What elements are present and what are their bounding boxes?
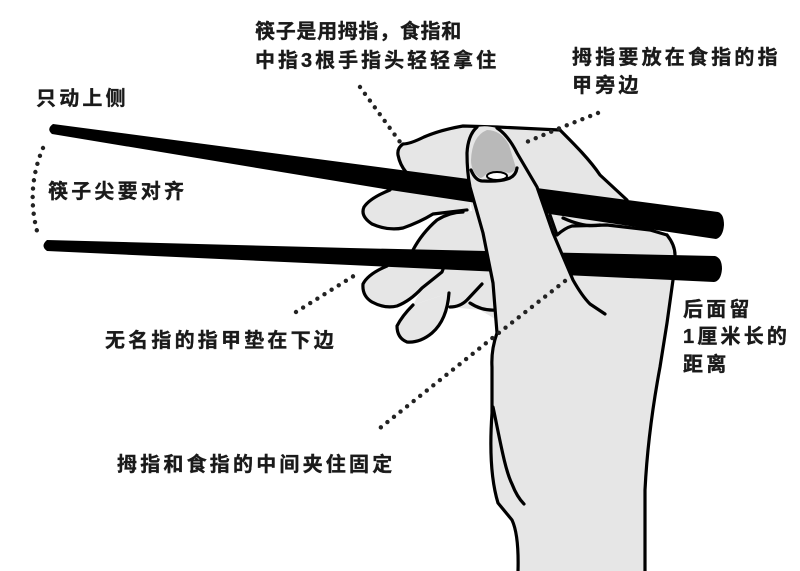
- dotted leader: ring finger: [296, 272, 360, 312]
- label: hold with three fingers: [255, 19, 499, 72]
- ring finger: [363, 264, 445, 307]
- dotted leader: top finger note: [360, 87, 400, 142]
- dotted arc: tips aligned: [33, 148, 43, 231]
- chopstick: upper: [49, 124, 724, 239]
- label: leave one centimeter behind: 后面留: [683, 297, 753, 321]
- middle finger: [363, 190, 467, 229]
- ring finger upper: [413, 212, 463, 250]
- label: leave one centimeter behind: 1厘米长的: [683, 325, 790, 348]
- label: thumb beside index nail: 甲旁边: [572, 73, 642, 97]
- label: thumb beside index nail: 拇指要放在食指的指: [572, 45, 781, 69]
- label: ring finger nail below: 无名指的指甲垫在下边: [105, 329, 337, 352]
- hand and wrist: [463, 126, 675, 571]
- thumbnail: [471, 130, 516, 178]
- label: tips aligned: 筷子尖要对齐: [48, 179, 187, 203]
- label: hold with three fingers: 筷子是用拇指，食指和: [255, 19, 462, 43]
- fill between the lower fingers: [400, 210, 497, 320]
- thumb outline: [467, 127, 605, 333]
- thumbnail tip: [471, 168, 517, 181]
- thumb: [467, 126, 605, 333]
- label: clamp between thumb and index: 拇指和食指的中间夹住固定: [117, 452, 395, 476]
- dotted leader: thumb and index: [375, 281, 565, 432]
- label: hold with three fingers: 中指3根手指头轻轻拿住: [255, 48, 499, 72]
- label: only move upper: 只动上侧: [36, 87, 129, 110]
- index finger fill: [403, 128, 478, 190]
- index finger: [398, 126, 560, 172]
- label: leave one centimeter behind: 距离: [683, 352, 729, 376]
- illustration: hand holding chopsticks: [44, 124, 724, 571]
- label: leave one centimeter behind: [683, 297, 790, 376]
- chopstick: lower: [44, 240, 722, 282]
- dotted leader: nail note: [522, 113, 598, 144]
- little finger: [397, 293, 449, 342]
- middle finger fill: [390, 185, 470, 214]
- lower knuckle lines: [450, 215, 667, 310]
- label: thumb beside index nail: [572, 45, 781, 97]
